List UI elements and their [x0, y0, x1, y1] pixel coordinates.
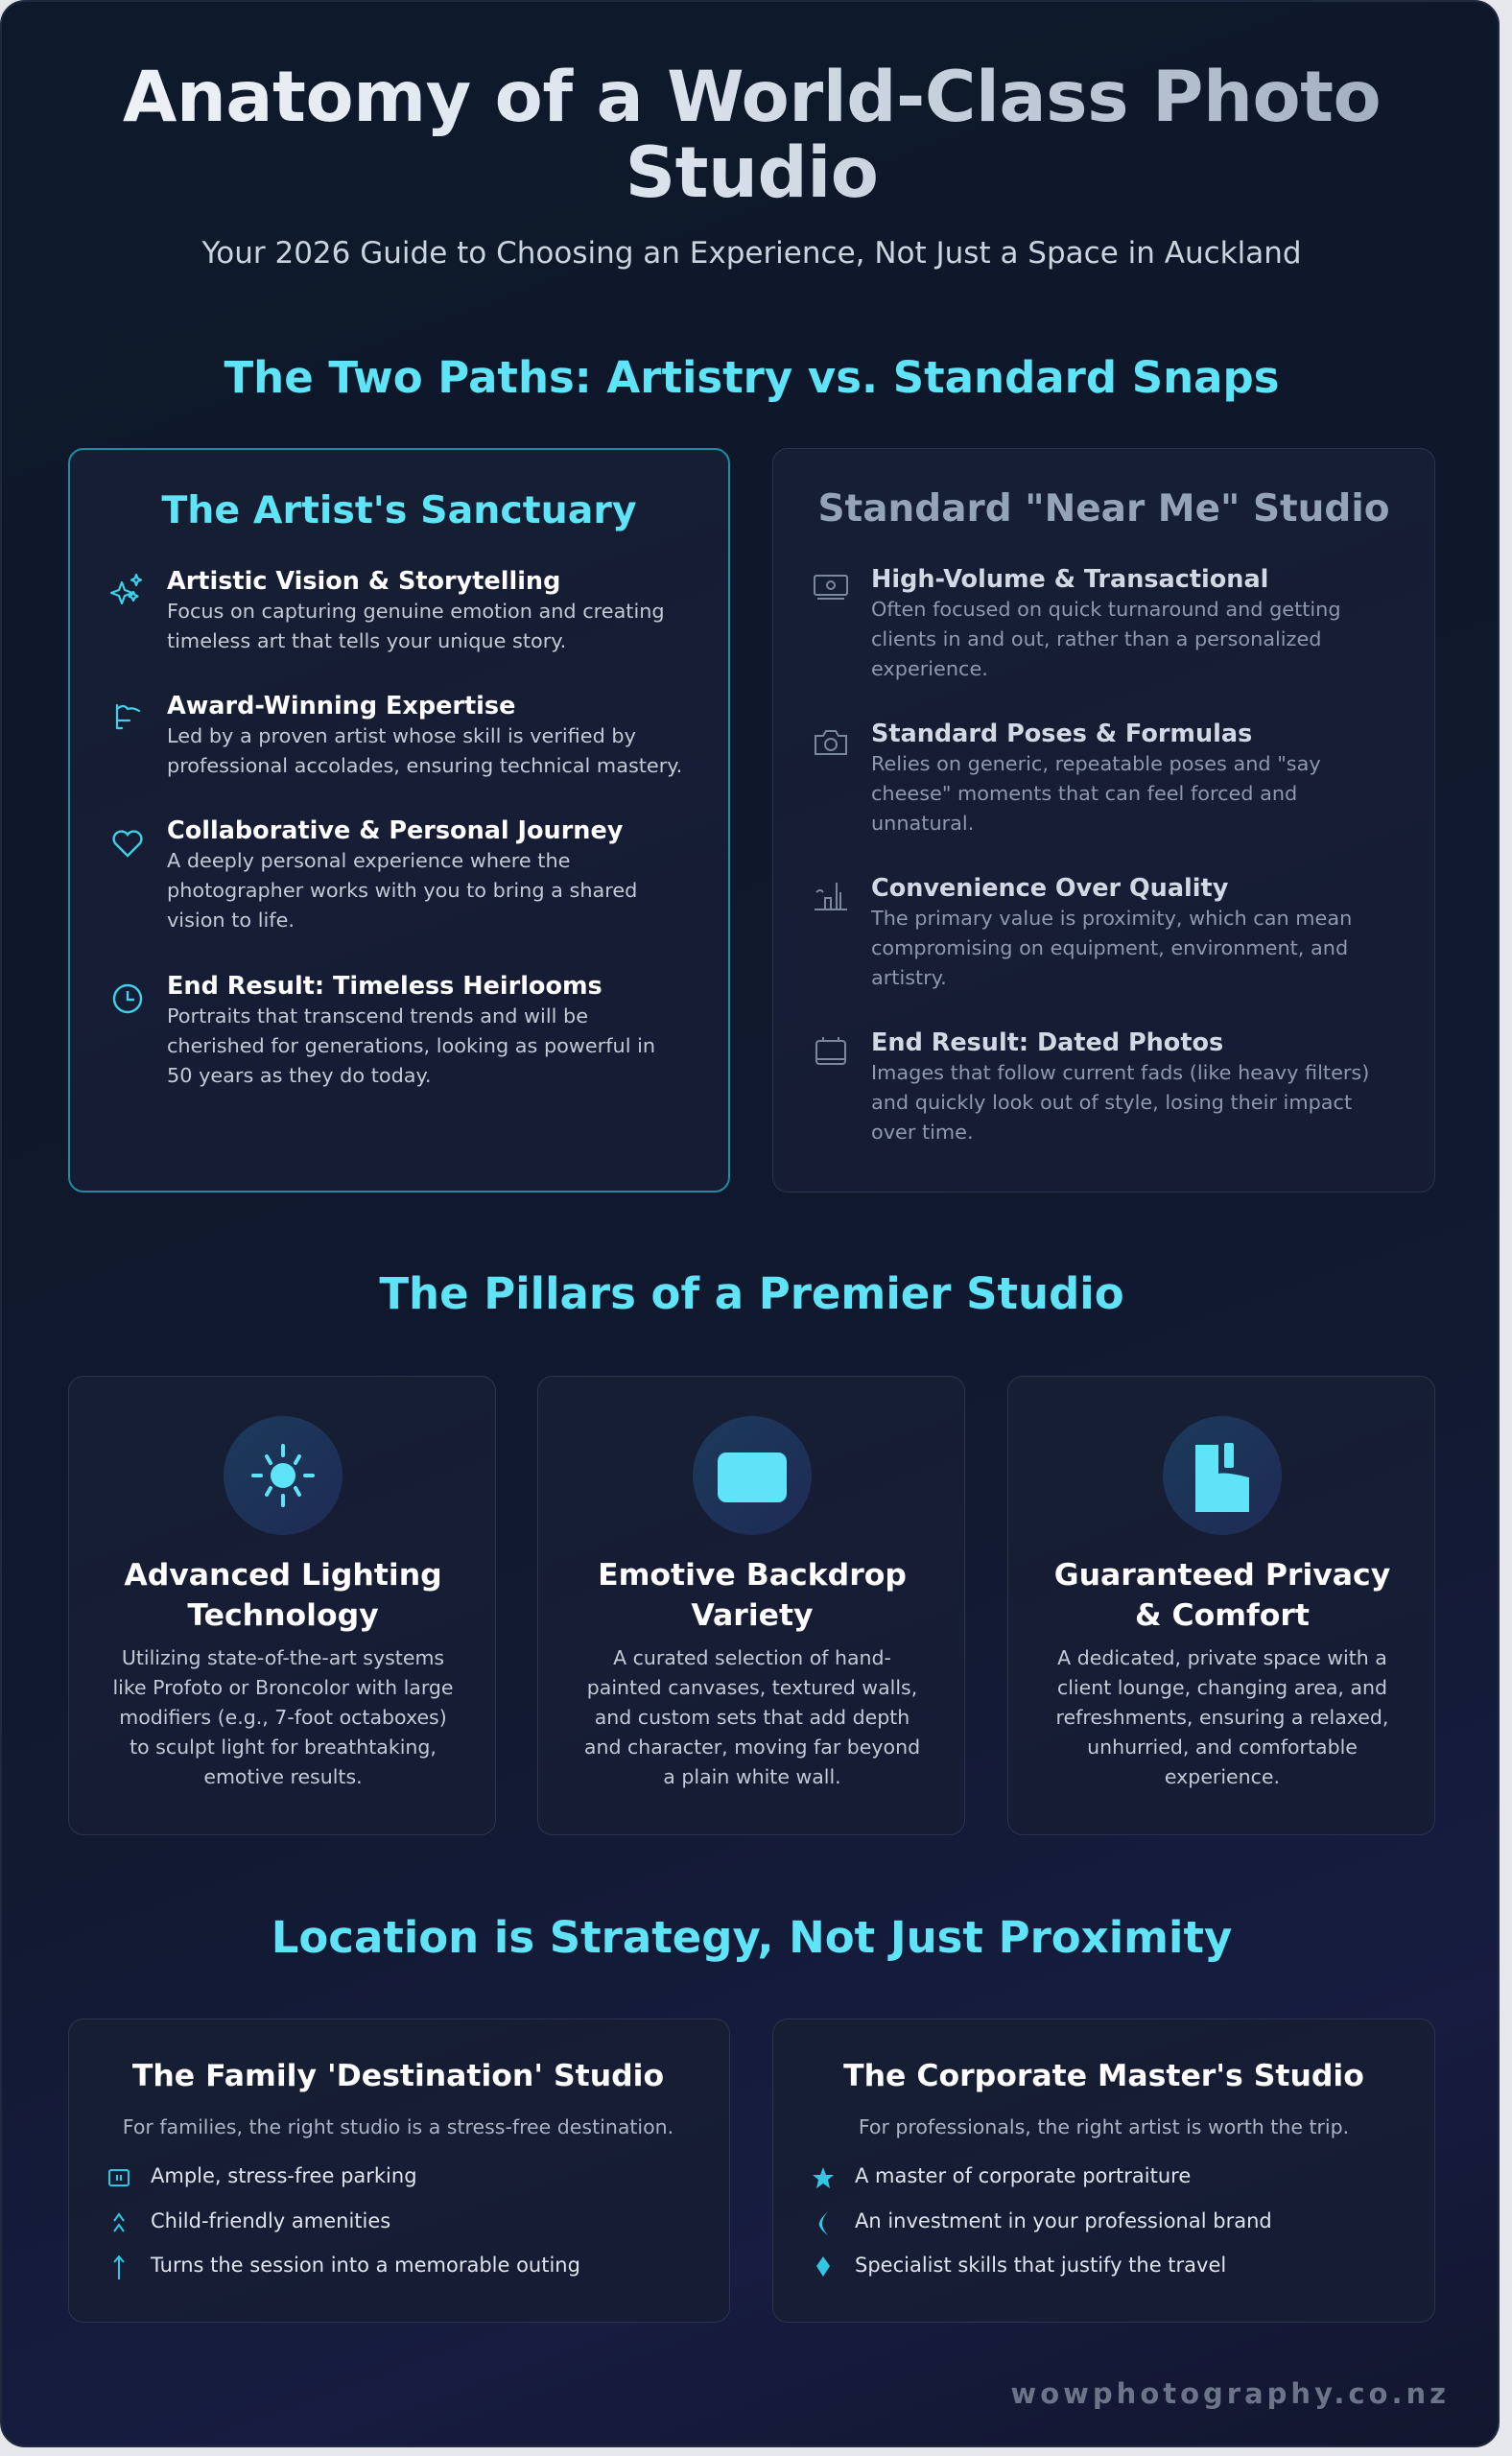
- pillar text: like Profoto or Broncolor with large: [112, 1676, 454, 1699]
- item: collaborative: Collaborative & Personal Journey: [167, 816, 623, 845]
- icon: chart: [815, 883, 847, 910]
- title: [2, 59, 1501, 211]
- item: timeless heirlooms: 50 years as they do today.: [167, 1064, 431, 1087]
- item: artistic vision: Artistic Vision & Storytelling: [167, 567, 560, 596]
- item: award-winning: Award-Winning Expertise: [167, 692, 515, 720]
- icon: sun: [224, 1416, 343, 1535]
- pillar text: painted canvases, textured walls,: [587, 1676, 917, 1699]
- item: convenience: artistry.: [871, 966, 947, 989]
- pillar text: [1056, 1646, 1388, 1788]
- item: collaborative: [167, 816, 637, 932]
- item: high volume: [871, 565, 1341, 680]
- icon: privacy door: [1163, 1416, 1282, 1535]
- item: high volume: Often focused on quick turnaround and getting: [871, 598, 1341, 621]
- heading: pillars: The Pillars of a Premier Studio: [379, 1268, 1124, 1319]
- pillar text: client lounge, changing area, and: [1057, 1676, 1387, 1699]
- item: timeless heirlooms: cherished for generations, looking as powerful in: [167, 1034, 655, 1057]
- title: Studio: [626, 132, 878, 214]
- item: dated photos: Images that follow current fads (like heavy filters): [871, 1061, 1369, 1084]
- pillar text: [112, 1646, 454, 1788]
- item: convenience: [871, 874, 1352, 989]
- pillar text: unhurried, and comfortable: [1087, 1736, 1358, 1759]
- pillar text: emotive results.: [203, 1765, 363, 1788]
- card title: The Family 'Destination' Studio: [132, 2059, 664, 2093]
- pillar title: [598, 1558, 907, 1633]
- title: Anatomy of a World-Class Photo: [123, 57, 1381, 138]
- item: dated photos: and quickly look out of style, losing their impact: [871, 1091, 1352, 1114]
- item: award-winning: [167, 692, 682, 777]
- item: artistic vision: [167, 567, 665, 652]
- heading: two paths: The Two Paths: Artistry vs. Standard Snaps: [224, 352, 1280, 403]
- icon: award: [115, 704, 140, 729]
- item: award-winning: professional accolades, ensuring technical mastery.: [167, 754, 682, 777]
- panel: privacy: [1007, 1376, 1435, 1835]
- heading: location: Location is Strategy, Not Just Proximity: [272, 1912, 1232, 1963]
- item: timeless heirlooms: Portraits that transcend trends and will be: [167, 1004, 588, 1027]
- item: standard poses: unnatural.: [871, 812, 974, 835]
- item: high volume: High-Volume & Transactional: [871, 565, 1268, 594]
- item: standard poses: cheese" moments that can feel forced and: [871, 782, 1297, 805]
- list item: investment: An investment in your professional brand: [855, 2209, 1272, 2232]
- pillar title: Guaranteed Privacy: [1054, 1558, 1390, 1593]
- list item: parking: Ample, stress-free parking: [151, 2164, 417, 2187]
- item: timeless heirlooms: [167, 972, 655, 1087]
- subtitle: Your 2026 Guide to Choosing an Experience, Not Just a Space in Auckland: [201, 236, 1302, 271]
- pillar text: to sculpt light for breathtaking,: [130, 1736, 437, 1759]
- pillar title: [1054, 1558, 1390, 1633]
- icon: cash: [814, 575, 848, 600]
- card title: Standard "Near Me" Studio: [817, 487, 1390, 531]
- item: collaborative: photographer works with you to bring a shared: [167, 879, 637, 902]
- panel: family destination: [68, 2019, 730, 2323]
- card subtitle: For families, the right studio is a stress-free destination.: [123, 2115, 673, 2138]
- icon: camera: [815, 730, 847, 755]
- card title: The Artist's Sanctuary: [161, 488, 637, 532]
- item: standard poses: [871, 720, 1321, 835]
- panel: emotive backdrop: [537, 1376, 965, 1835]
- item: collaborative: A deeply personal experience where the: [167, 849, 570, 872]
- item: high volume: clients in and out, rather than a personalized: [871, 627, 1321, 650]
- pillar text: a plain white wall.: [663, 1765, 841, 1788]
- pillar text: and custom sets that add depth: [595, 1706, 910, 1729]
- icon: sparkles: [109, 574, 142, 604]
- pillar text: Utilizing state-of-the-art systems: [122, 1646, 444, 1669]
- icon: backdrop: [693, 1416, 812, 1535]
- item: timeless heirlooms: End Result: Timeless Heirlooms: [167, 972, 602, 1001]
- pillar text: experience.: [1165, 1765, 1280, 1788]
- pillar title: [124, 1558, 442, 1633]
- card title: The Corporate Master's Studio: [843, 2059, 1364, 2093]
- card subtitle: For professionals, the right artist is worth the trip.: [859, 2115, 1349, 2138]
- pillar title: & Comfort: [1135, 1598, 1310, 1633]
- pillar title: Technology: [187, 1598, 379, 1633]
- pillar text: modifiers (e.g., 7-foot octaboxes): [119, 1706, 447, 1729]
- pillar title: Advanced Lighting: [124, 1558, 442, 1593]
- list item: master: A master of corporate portraiture: [855, 2164, 1191, 2187]
- icon: heart: [112, 830, 143, 858]
- pillar text: [584, 1646, 920, 1788]
- list item: child-friendly: Child-friendly amenities: [151, 2209, 390, 2232]
- item: dated photos: [871, 1028, 1369, 1144]
- icon: calendar: [815, 1037, 846, 1065]
- pillar title: Emotive Backdrop: [598, 1558, 907, 1593]
- item: standard poses: Relies on generic, repeatable poses and "say: [871, 752, 1321, 775]
- item: artistic vision: Focus on capturing genuine emotion and creating: [167, 600, 665, 623]
- item: standard poses: Standard Poses & Formulas: [871, 720, 1252, 748]
- pillar text: A dedicated, private space with a: [1057, 1646, 1387, 1669]
- pillar title: Variety: [691, 1598, 814, 1633]
- item: award-winning: Led by a proven artist whose skill is verified by: [167, 724, 636, 747]
- item: dated photos: End Result: Dated Photos: [871, 1028, 1223, 1057]
- item: artistic vision: timeless art that tells your unique story.: [167, 629, 566, 652]
- item: collaborative: vision to life.: [167, 909, 295, 932]
- item: high volume: experience.: [871, 657, 988, 680]
- panel: advanced lighting: [68, 1376, 496, 1835]
- item: dated photos: over time.: [871, 1121, 974, 1144]
- item: convenience: compromising on equipment, environment, and: [871, 936, 1348, 959]
- list item: specialist: Specialist skills that justify the travel: [855, 2254, 1226, 2277]
- item: convenience: Convenience Over Quality: [871, 874, 1228, 903]
- pillar text: and character, moving far beyond: [584, 1736, 920, 1759]
- panel: artist's sanctuary: [68, 448, 730, 1193]
- pillar text: refreshments, ensuring a relaxed,: [1056, 1706, 1388, 1729]
- panel: standard near me studio: [772, 448, 1435, 1193]
- icon: clock: [113, 984, 142, 1013]
- item: convenience: The primary value is proximity, which can mean: [871, 907, 1352, 930]
- pillar text: A curated selection of hand-: [613, 1646, 891, 1669]
- footer: website: wowphotography.co.nz: [1010, 2377, 1450, 2410]
- list item: memorable outing: Turns the session into a memorable outing: [151, 2254, 580, 2277]
- panel: corporate master: [772, 2019, 1435, 2323]
